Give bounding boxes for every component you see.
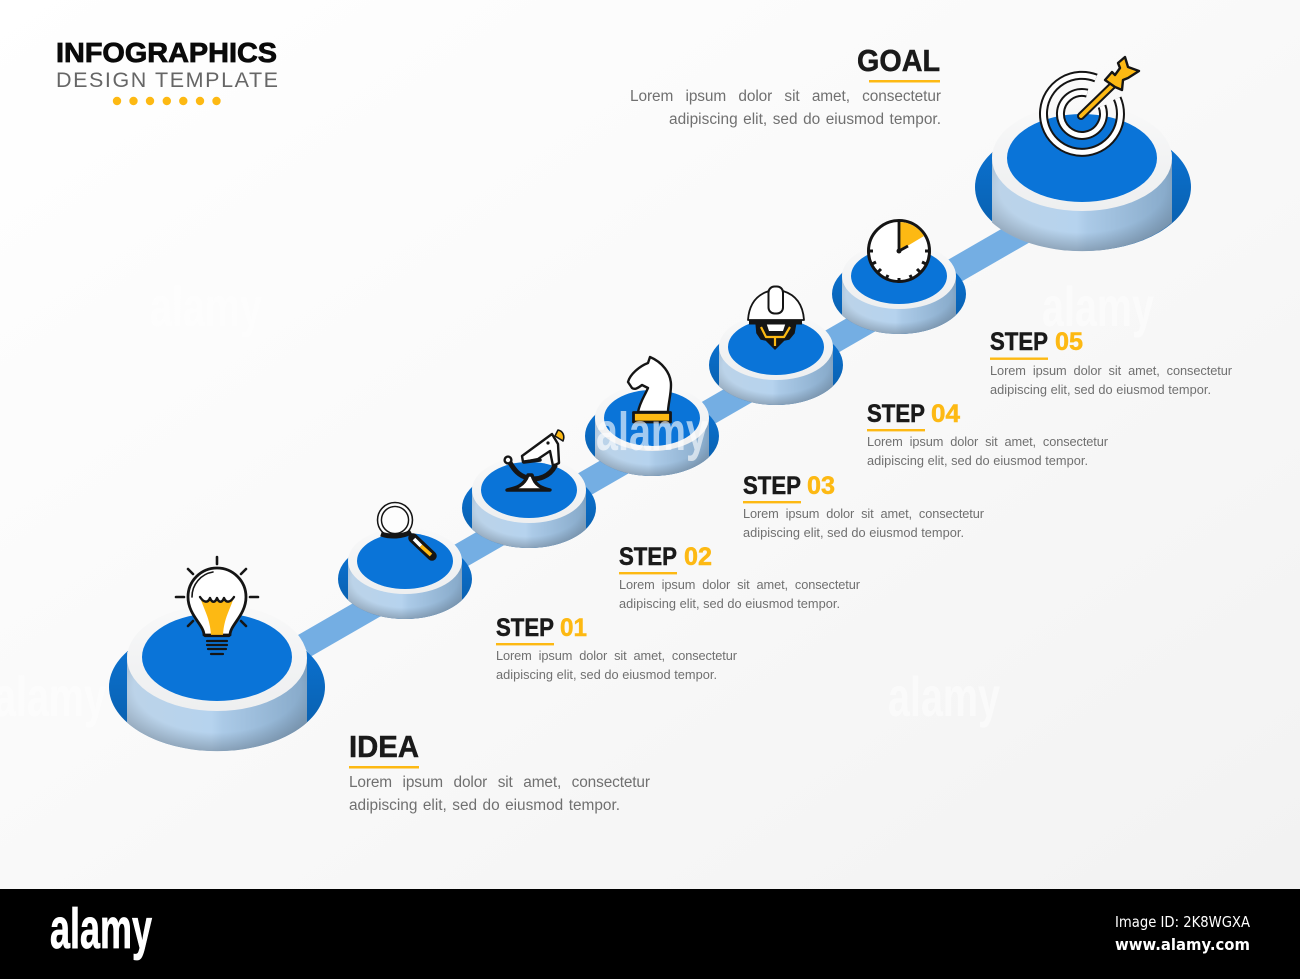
watermarks: alamy: [1042, 275, 1154, 338]
step 01 text block: [496, 614, 738, 682]
step 03 text block: Lorem ipsum dolor sit amet, consectetur: [743, 506, 985, 521]
step 04 text block: Lorem ipsum dolor sit amet, consectetur: [867, 434, 1109, 449]
step 04 text block: [867, 400, 1109, 468]
watermarks: alamy: [150, 275, 262, 338]
title: DESIGN TEMPLATE: [56, 68, 278, 92]
step 04 text block: adipiscing elit, sed do eiusmod tempor.: [867, 453, 1088, 468]
idea text block: Lorem ipsum dolor sit amet, consectetur: [349, 774, 650, 791]
connecting diagonal band: [298, 224, 1032, 657]
step 05 text block: [990, 328, 1233, 397]
step 03 text block: 03: [807, 472, 835, 500]
platform: idea: [109, 605, 325, 751]
footer bar: Image ID: 2K8WGXA: [1115, 913, 1251, 931]
platform: step 05: [832, 243, 966, 334]
footer bar: [0, 889, 1300, 979]
icon: helmet and gear: [748, 286, 804, 349]
idea text block: adipiscing elit, sed do eiusmod tempor.: [349, 797, 620, 814]
footer bar: www.alamy.com: [1115, 935, 1250, 954]
step 05 text block: adipiscing elit, sed do eiusmod tempor.: [990, 382, 1211, 397]
goal text block: [630, 43, 941, 128]
step 01 text block: adipiscing elit, sed do eiusmod tempor.: [496, 667, 717, 682]
step 05 text block: Lorem ipsum dolor sit amet, consectetur: [990, 363, 1233, 378]
step 05 text block: STEP: [990, 328, 1048, 356]
step 02 text block: adipiscing elit, sed do eiusmod tempor.: [619, 596, 840, 611]
footer bar: alamy: [50, 897, 152, 961]
step 02 text block: 02: [684, 543, 712, 571]
step 04 text block: STEP: [867, 400, 925, 428]
platform: goal: [975, 105, 1191, 251]
idea text block: IDEA: [349, 729, 419, 764]
step 03 text block: STEP: [743, 472, 801, 500]
translucent watermark over step 03: alamy: [596, 402, 708, 462]
step 01 text block: 01: [560, 614, 587, 642]
icon: magnifying glass: [380, 504, 432, 556]
platform: step 01: [338, 528, 472, 619]
goal text block: GOAL: [857, 43, 940, 78]
watermarks: [0, 275, 1154, 728]
icon: light bulb: [176, 557, 258, 654]
icon: microscope: [505, 430, 564, 490]
goal text block: adipiscing elit, sed do eiusmod tempor.: [669, 111, 941, 128]
step 02 text block: STEP: [619, 543, 677, 571]
watermarks: alamy: [888, 665, 1000, 728]
step 05 text block: 05: [1055, 328, 1083, 356]
goal text block: Lorem ipsum dolor sit amet, consectetur: [630, 88, 941, 105]
icon: chess knight: [628, 357, 671, 422]
icon: target and arrow: [1043, 57, 1139, 152]
icon: clock: [868, 220, 930, 283]
step 02 text block: Lorem ipsum dolor sit amet, consectetur: [619, 577, 861, 592]
step 02 text block: [619, 543, 861, 611]
step 03 text block: [743, 472, 985, 540]
step 04 text block: 04: [931, 400, 960, 428]
platform: step 02: [462, 457, 596, 548]
step 01 text block: STEP: [496, 614, 554, 642]
platform: step 04: [709, 314, 843, 405]
title: INFOGRAPHICS: [56, 37, 277, 68]
title: [56, 37, 278, 105]
platform: step 03: [585, 385, 719, 476]
step 01 text block: Lorem ipsum dolor sit amet, consectetur: [496, 648, 738, 663]
idea text block: [349, 729, 650, 814]
step 03 text block: adipiscing elit, sed do eiusmod tempor.: [743, 525, 964, 540]
